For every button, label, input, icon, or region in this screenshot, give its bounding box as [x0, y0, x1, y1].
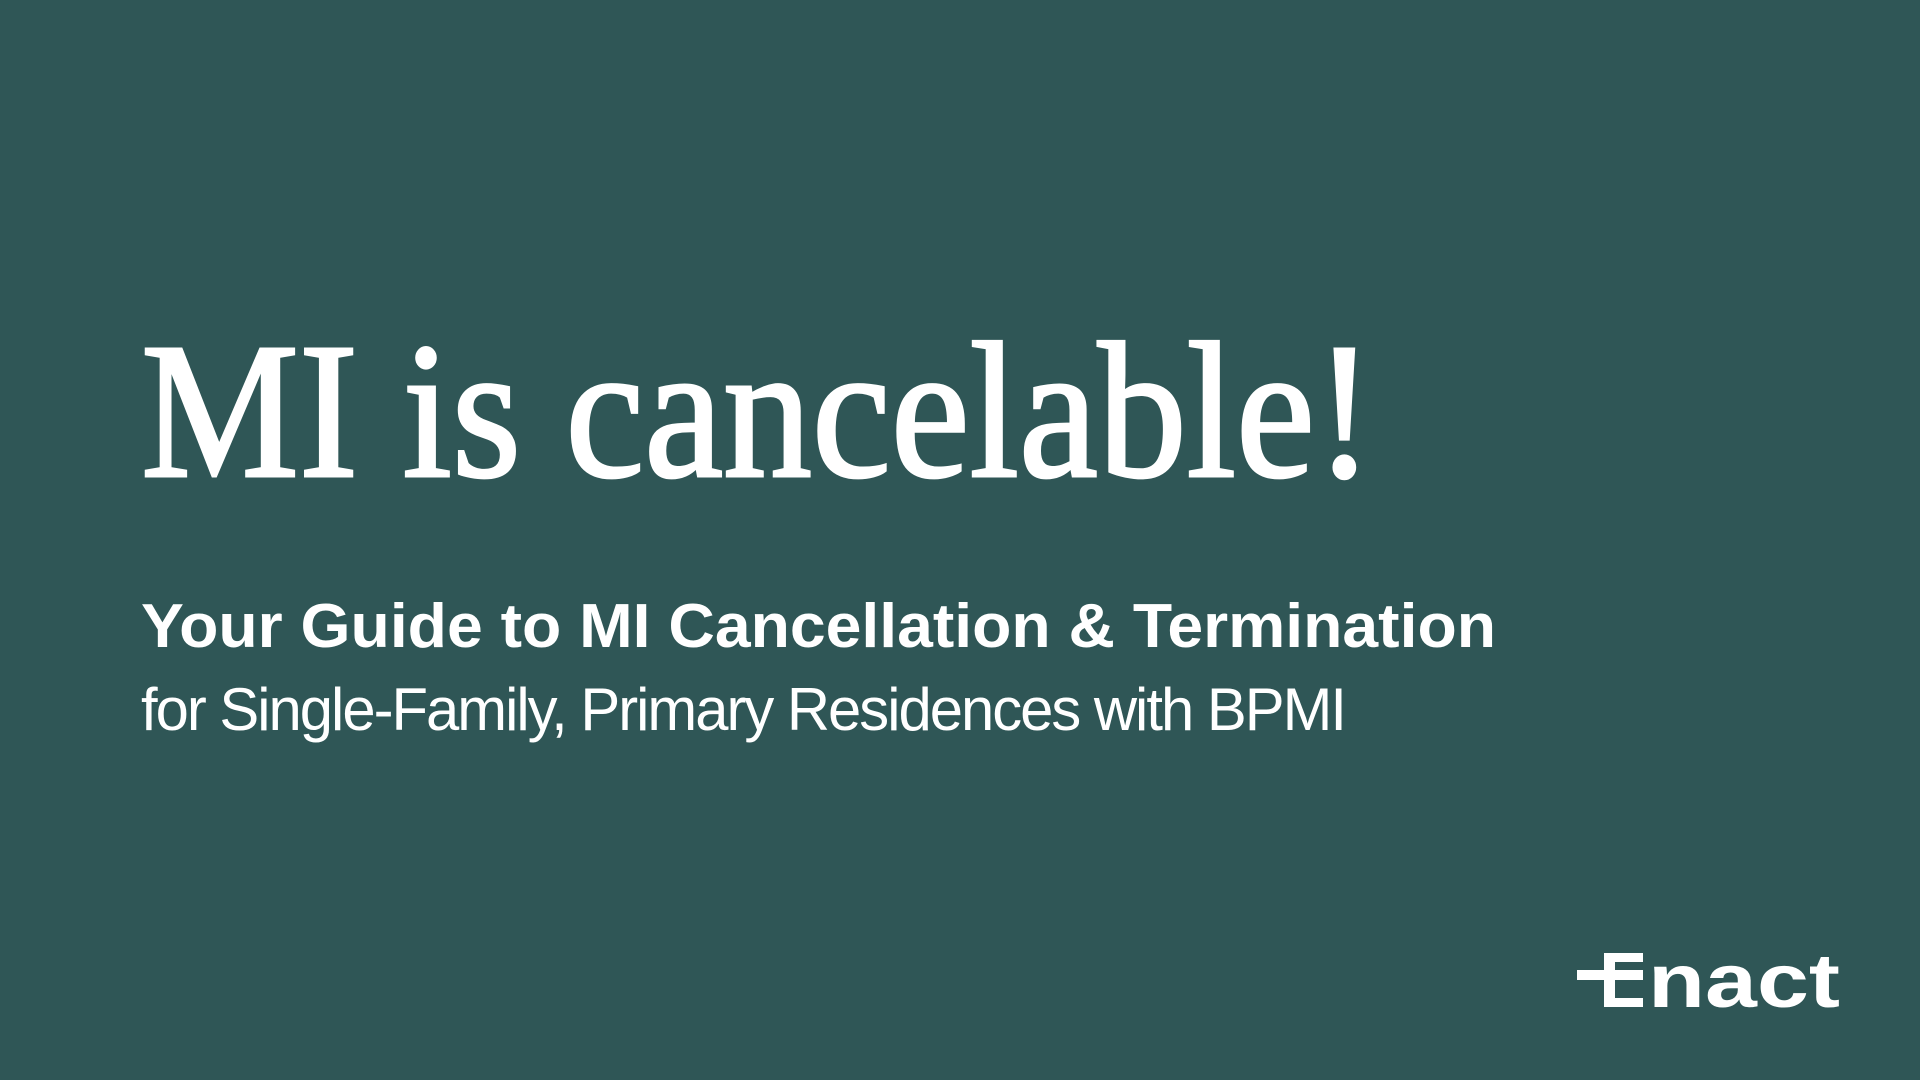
subtitle heading: Your Guide to MI Cancellation & Termination [141, 592, 1496, 661]
icon: logo mark [1577, 953, 1643, 1007]
subtitle description: for Single-Family, Primary Residences with BPMI [141, 676, 1345, 743]
title: MI is cancelable! [141, 303, 1374, 518]
logo: Enact [1577, 939, 1840, 1024]
logo: Enact: nact [1648, 939, 1840, 1024]
